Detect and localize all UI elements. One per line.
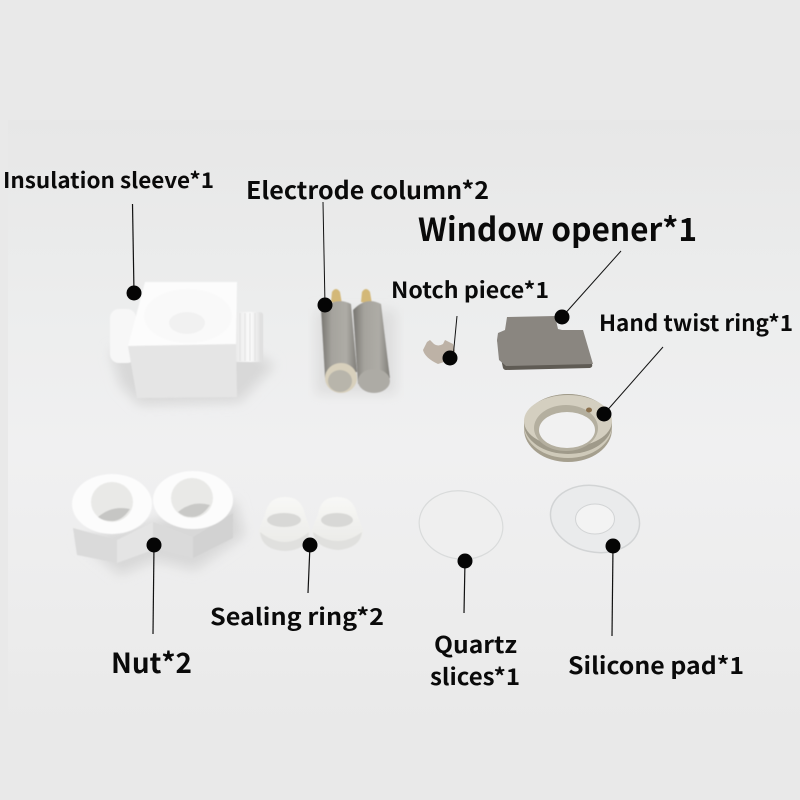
part: window opener plate: [497, 316, 593, 370]
label: quartz slices: slices*1: [430, 658, 520, 692]
part: sealing rings: [259, 497, 363, 551]
part: quartz slice: [415, 485, 507, 565]
label: sealing ring: Sealing ring*2: [210, 598, 384, 632]
label: nut: Nut*2: [111, 642, 192, 682]
label: nut: [111, 538, 192, 682]
label: electrode column: Electrode column*2: [246, 171, 489, 206]
label: electrode column: [246, 171, 489, 312]
part: electrode columns: [316, 289, 396, 394]
part: nut: [72, 471, 245, 575]
label: insulation sleeve: Insulation sleeve*1: [3, 164, 214, 195]
label: quartz slices: [430, 554, 520, 692]
label: silicone pad: Silicone pad*1: [568, 647, 744, 681]
label: insulation sleeve: [3, 164, 214, 300]
label: notch piece: Notch piece*1: [391, 273, 549, 305]
part: silicone pad: [544, 477, 646, 561]
label: notch piece: [391, 273, 549, 366]
label: window opener: [418, 205, 697, 324]
part: notch piece: [423, 340, 455, 364]
label: silicone pad: [568, 538, 744, 681]
label: quartz slices: Quartz: [434, 626, 517, 660]
part: insulation sleeve: [110, 282, 275, 405]
label: window opener: Window opener*1: [418, 205, 697, 251]
label: hand twist ring: Hand twist ring*1: [599, 306, 793, 338]
part: hand twist ring: [524, 394, 612, 462]
label: hand twist ring: [596, 306, 793, 422]
label: sealing ring: [210, 538, 384, 632]
